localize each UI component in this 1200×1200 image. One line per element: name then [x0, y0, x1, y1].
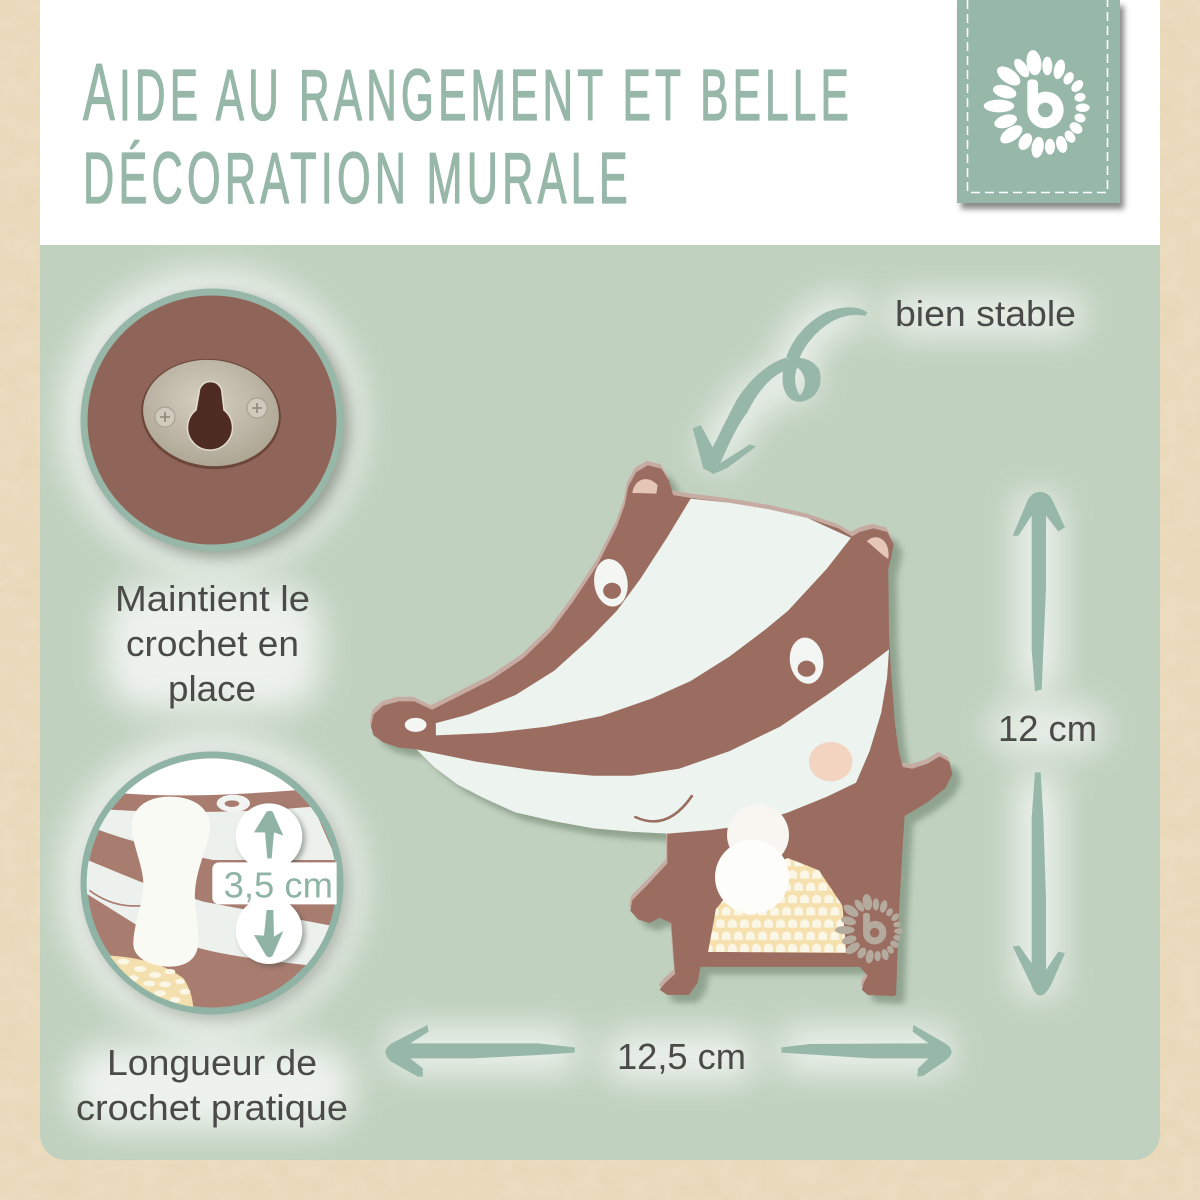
text: Maintient le crochet en place: Maintient le [115, 578, 310, 619]
text: bien stable: bien stable [895, 293, 1076, 334]
arrow: height up [1013, 492, 1065, 691]
hook closeup photo [86, 758, 337, 1007]
hook peg [715, 804, 789, 914]
smile [635, 796, 692, 821]
white stripes [436, 499, 851, 735]
keyhole plate [136, 352, 286, 476]
text: Maintient le crochet en place: crochet en [126, 623, 299, 664]
text: Maintient le crochet en place: place [168, 668, 256, 709]
arrow: height down [1013, 772, 1065, 995]
small logo on badger [835, 894, 903, 964]
header band [40, 0, 1160, 245]
arrow: width right [781, 1025, 952, 1077]
title: DÉCORATION MURALE [83, 139, 632, 219]
brand tag with logo [957, 0, 1124, 209]
title [83, 48, 853, 219]
text: Longueur de crochet pratique [76, 1042, 348, 1128]
label: 12 cm: 12 cm [998, 708, 1097, 749]
belly patch [708, 858, 846, 953]
eyes [592, 557, 630, 608]
arrow: width left [385, 1025, 575, 1077]
badger wall hook [370, 461, 961, 1004]
board edge [370, 461, 951, 991]
arrow up [254, 811, 283, 858]
green panel [40, 245, 1160, 1160]
body silhouette [371, 465, 952, 996]
cheek [809, 742, 852, 781]
text: Longueur de crochet pratique: crochet pratique [76, 1087, 348, 1128]
text: Longueur de crochet pratique: Longueur de [107, 1042, 317, 1083]
text: Maintient le crochet en place [115, 578, 310, 709]
ears [632, 479, 658, 494]
arrow: curl pointing to badger top [693, 307, 867, 474]
logo [984, 49, 1090, 159]
nose [405, 718, 427, 732]
drop shadow [379, 473, 961, 1004]
badger drawing [370, 461, 952, 996]
panel: hook length detail [70, 745, 353, 1020]
label 3,5 cm: 3,5 cm [224, 865, 333, 906]
arrow down [254, 910, 283, 957]
label: 12,5 cm: 12,5 cm [617, 1036, 746, 1077]
panel: mounting plate detail [84, 292, 349, 557]
circle ring and backing [84, 292, 340, 548]
